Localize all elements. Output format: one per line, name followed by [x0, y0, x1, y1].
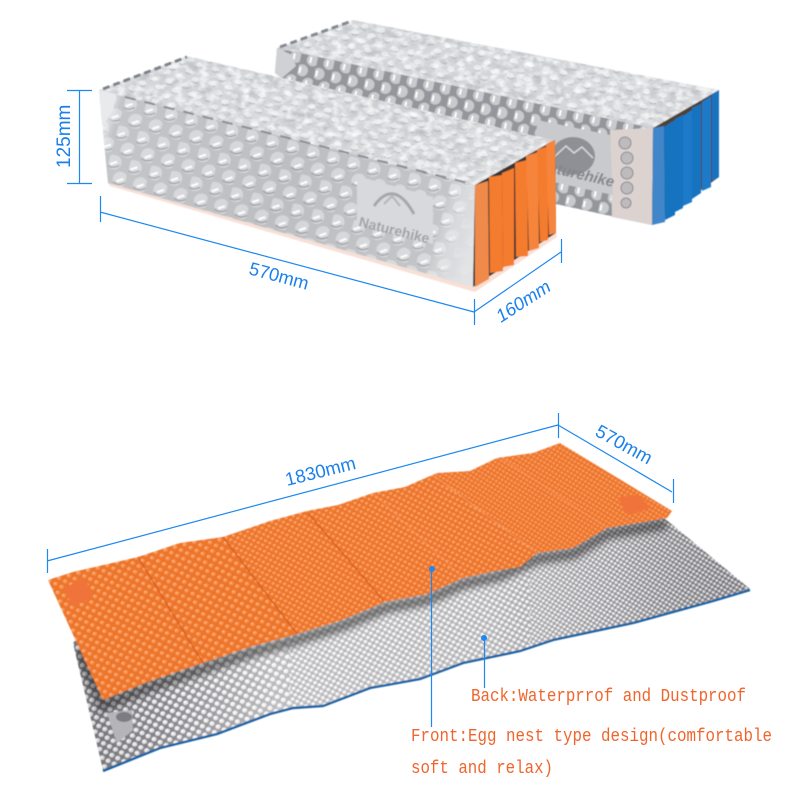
dimension: 570mm mat width: 570mm [592, 420, 656, 468]
dimension: 125mm: 125mm [54, 105, 75, 168]
dimension: 1830mm [47, 413, 558, 573]
blue pleated end [652, 90, 719, 225]
top texture light back mat [277, 20, 719, 128]
corner highlight [99, 90, 116, 125]
logo on silver [107, 710, 133, 743]
dimension: 160mm block width [474, 239, 562, 326]
dimension: 125mm [54, 90, 92, 184]
pink shadow under front mat [108, 183, 557, 292]
callout: back: Back:Waterprrof and Dustproof [471, 687, 746, 707]
top texture light front mat [99, 56, 553, 185]
side face front mat [99, 90, 475, 287]
dimension: 570mm block length: 570mm [247, 258, 311, 294]
logo plate front mat [357, 176, 433, 246]
unfolded mat [48, 442, 751, 773]
folded mat: orange front [99, 56, 557, 292]
pleated edge back mat [280, 21, 352, 47]
top face front mat [99, 56, 553, 185]
end panel of back mat [610, 128, 653, 225]
logo plate back mat: Naturehike [537, 157, 616, 191]
top texture dark back mat [277, 20, 719, 128]
side face back mat [275, 48, 653, 225]
bumpy ridge [125, 97, 472, 184]
fold lines dark [138, 512, 384, 663]
logo plate front mat: Naturehike [357, 213, 432, 246]
silver back face [72, 518, 750, 770]
dimension: 570mm mat width [558, 420, 674, 503]
pointer: back [481, 635, 487, 688]
logo plate back mat [535, 120, 616, 195]
side light falloff [99, 90, 475, 287]
fold lines light [373, 457, 607, 578]
bump column of back mat [619, 137, 633, 208]
callout: front: soft and relax) [411, 759, 553, 779]
folded mat: blue back [275, 20, 719, 225]
blue underside edge [103, 590, 750, 771]
orange front face [48, 442, 672, 701]
dimension: 570mm block length [100, 196, 474, 325]
pleated edge front mat [103, 57, 187, 89]
left patch [63, 578, 93, 607]
top texture dark front mat [99, 56, 553, 185]
pointer: front [429, 566, 435, 727]
right patch [618, 495, 652, 515]
dimension: 160mm block width: 160mm [492, 276, 554, 326]
left wedge back mat [275, 48, 296, 78]
dimension: 1830mm: 1830mm [283, 452, 358, 490]
orange pleated end [473, 140, 556, 287]
top face back mat [277, 20, 719, 128]
